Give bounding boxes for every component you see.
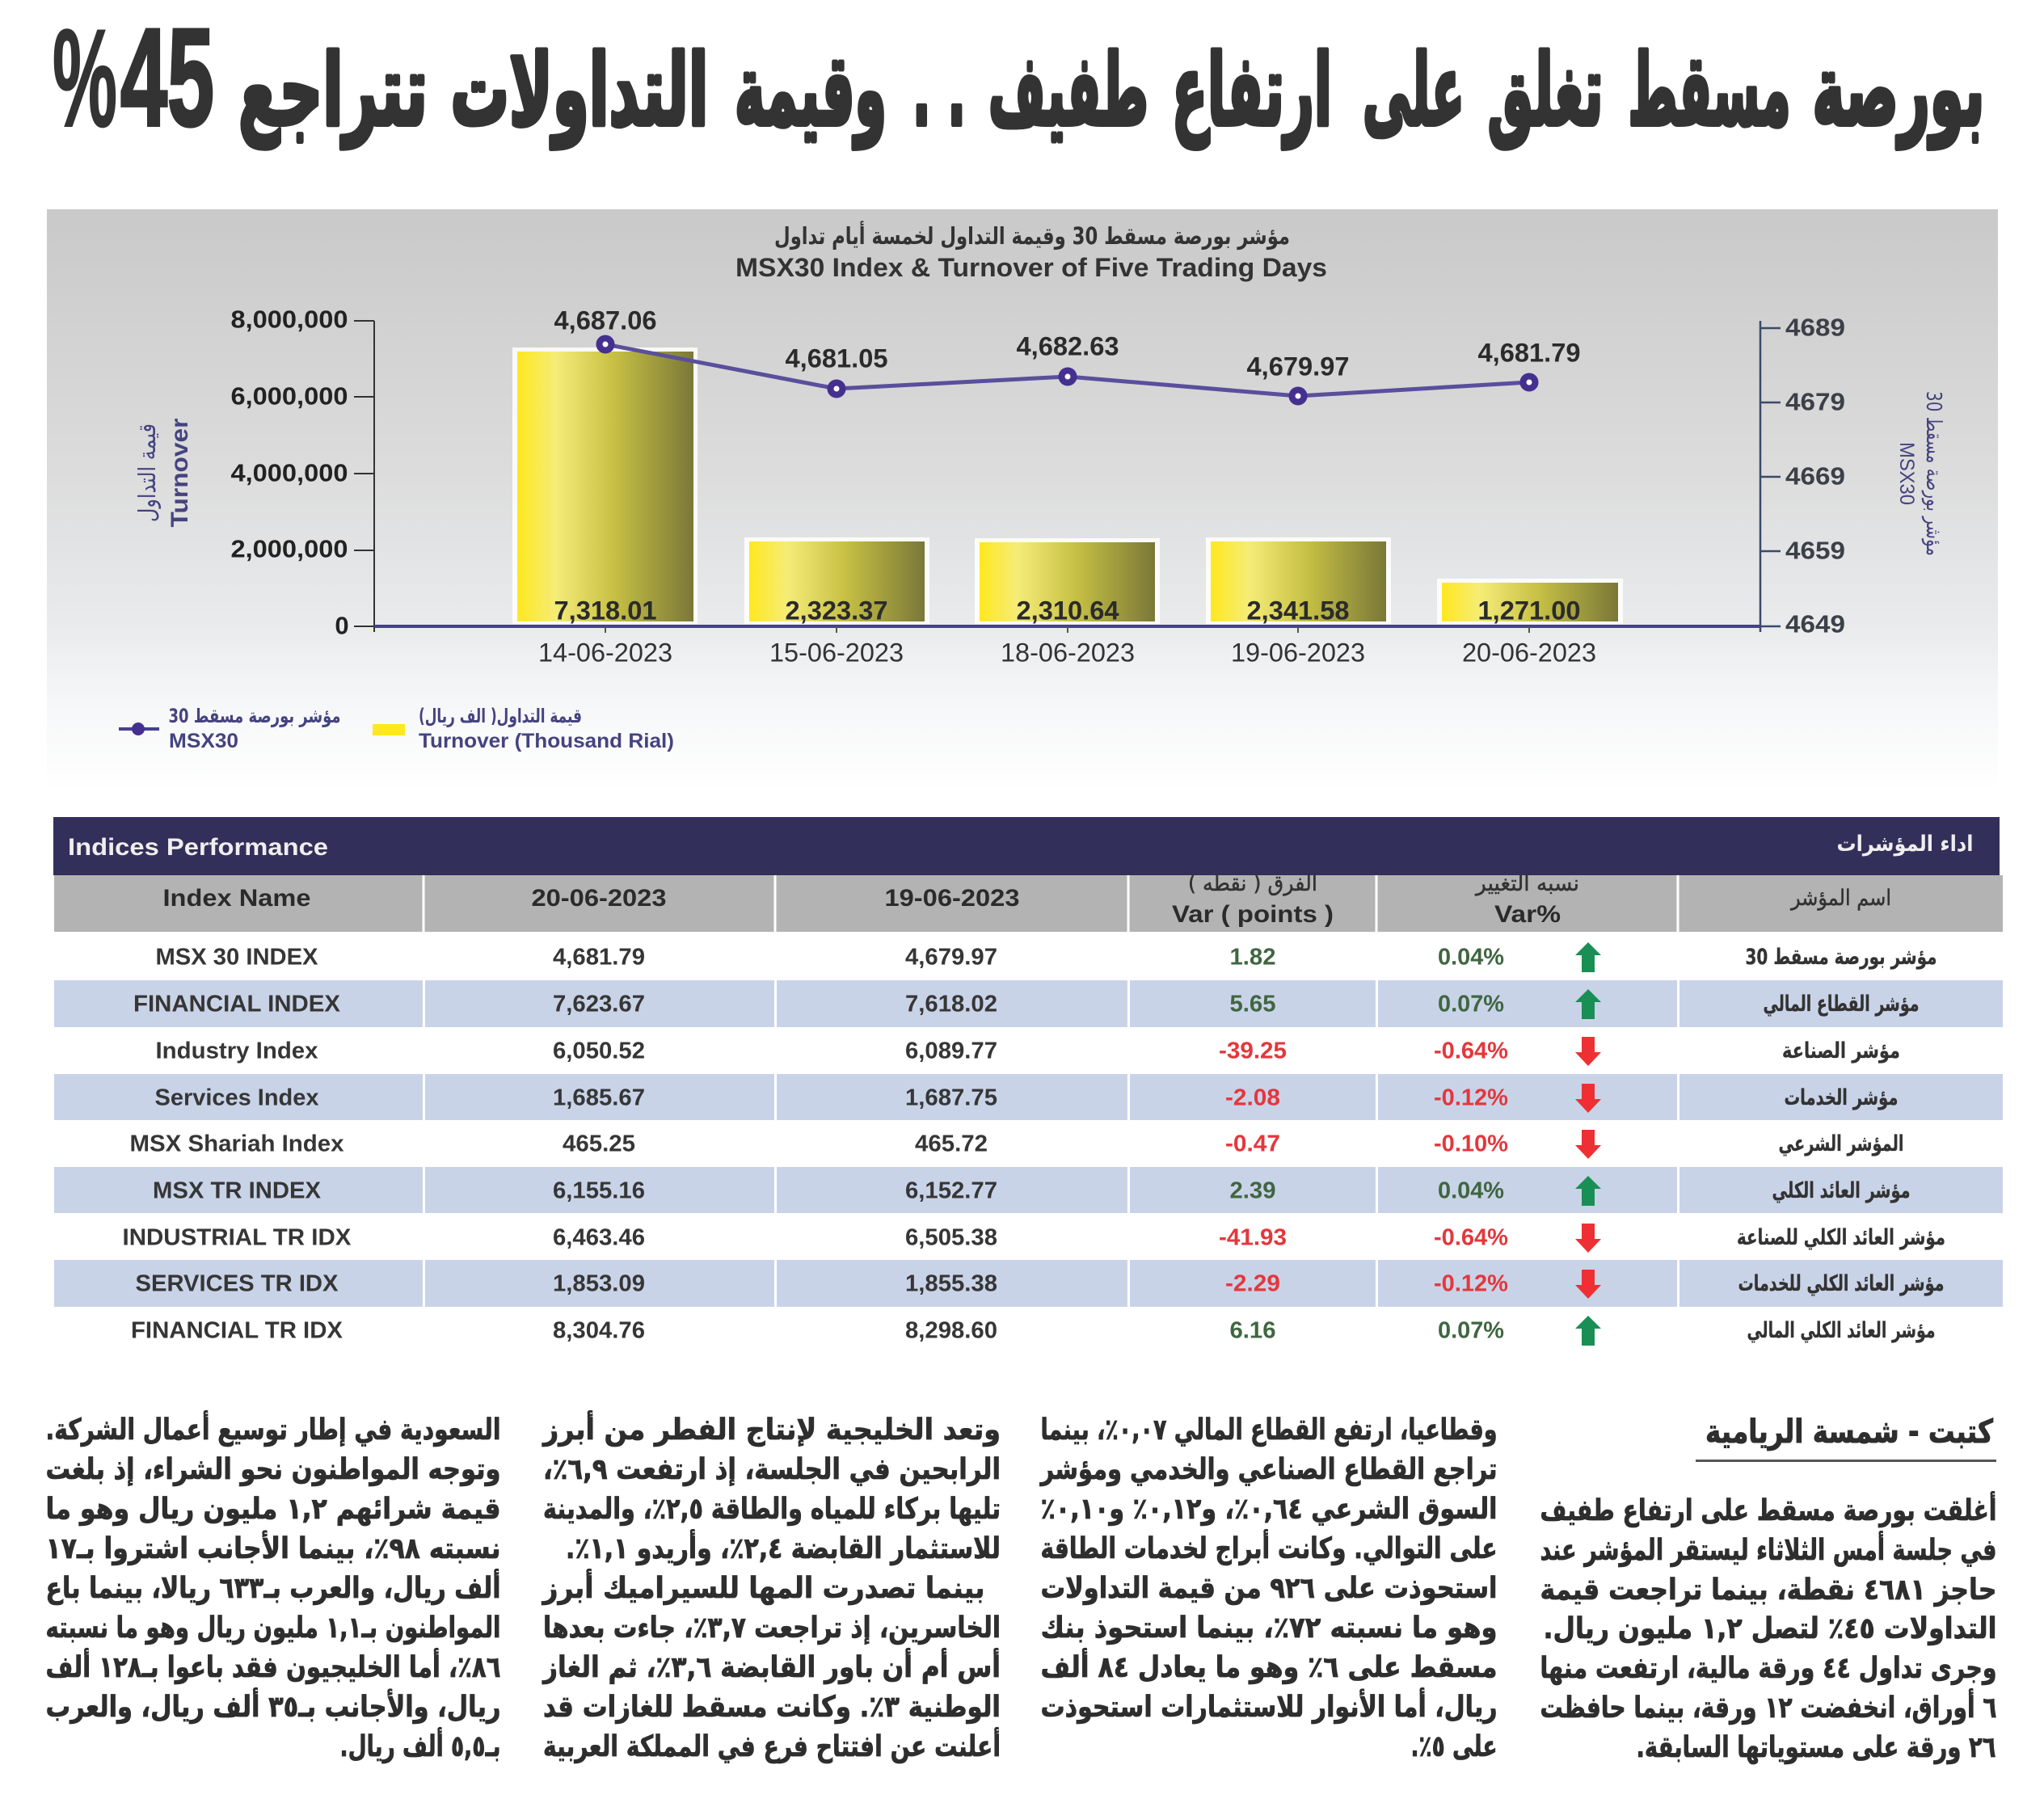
bars — [512, 348, 1623, 626]
text column 3: الخاسرين، إذ تراجعت ٣,٧٪، جاءت بعدها — [543, 1611, 1001, 1645]
legend: مؤشر بورصة مسقط 30 — [168, 705, 341, 727]
row: FINANCIAL TR IDX: FINANCIAL TR IDX — [131, 1317, 343, 1343]
row: FINANCIAL INDEX: 7,623.67 — [553, 991, 645, 1017]
right axis title: MSX30 — [1895, 442, 1918, 505]
row: Industry Index: 6,050.52 — [553, 1038, 645, 1064]
row: SERVICES TR IDX: 1,855.38 — [905, 1270, 997, 1296]
row: Services Index: -2.08 — [1225, 1085, 1280, 1110]
chart heading: MSX30 Index & Turnover of Five Trading Days — [735, 253, 1327, 282]
text column 4: ريال، والأجانب بـ٣٥ ألف ريال، والعرب — [45, 1687, 501, 1724]
table column headers: الفرق ( نقطه ) — [1188, 871, 1317, 896]
title: 45 — [120, 0, 214, 155]
bar: 14-06-2023 — [512, 348, 697, 626]
text column 3: تليها بركاء للمياه والطاقة ٢,٥٪، والمدينة — [543, 1493, 1001, 1526]
text column 4: نسبته ٩٨٪، بينما الأجانب اشتروا بـ١٧ — [45, 1530, 501, 1565]
panel: chart — [47, 209, 1998, 791]
row: Industry Index — [155, 1037, 1900, 1066]
row: Industry Index: Industry Index — [155, 1038, 318, 1064]
left axis — [231, 305, 374, 640]
row: MSX 30 INDEX: 0.04% — [1438, 944, 1504, 970]
x axis and date labels: 15-06-2023 — [769, 638, 904, 668]
line series MSX30: 4,681.79 — [1477, 338, 1581, 367]
text column 2: السوق الشرعي ٠,٦٤٪، و٠,١٢٪ و٠,١٠٪ — [1041, 1493, 1497, 1526]
bar: 19-06-2023: 2,341.58 — [1246, 596, 1350, 626]
text column 2: ريال، أما الأنوار للاستثمارات استحوذت — [1041, 1687, 1497, 1724]
text column 3: الوطنية ٣٪. وكانت مسقط للغازات قد — [543, 1691, 1001, 1724]
line series MSX30 — [554, 305, 1581, 402]
left axis: 2,000,000 — [231, 535, 348, 562]
left axis title — [133, 418, 193, 527]
table title bar: Indices Performance — [68, 834, 328, 861]
right axis: 4679 — [1785, 388, 1845, 415]
table column headers: Index Name — [163, 885, 310, 912]
text column 1: وجرى تداول ٤٤ ورقة مالية، ارتفعت منها — [1540, 1652, 1996, 1685]
row: FINANCIAL TR IDX — [131, 1316, 1935, 1346]
title: على — [1363, 33, 1465, 148]
left axis: 8,000,000 — [231, 305, 348, 333]
right axis: 4669 — [1785, 462, 1845, 490]
table column headers: Var ( points ) — [1172, 901, 1334, 928]
text column 1 — [1540, 1491, 1996, 1764]
row: Services Index: مؤشر الخدمات — [1785, 1085, 1898, 1110]
table title bar: اداء المؤشرات — [1836, 832, 1974, 857]
left axis: 0 — [335, 611, 349, 640]
bar: 20-06-2023: 1,271.00 — [1477, 596, 1581, 626]
row: SERVICES TR IDX: -0.12% — [1434, 1270, 1508, 1296]
row: Services Index: 1,685.67 — [553, 1085, 645, 1110]
table column headers: 19-06-2023 — [884, 885, 1020, 912]
row: MSX Shariah Index: MSX Shariah Index — [129, 1131, 344, 1157]
row: SERVICES TR IDX: 1,853.09 — [553, 1270, 645, 1296]
text column 4: قيمة شرائهم ١,٢ مليون ريال وهو ما — [46, 1493, 501, 1526]
chart heading — [735, 221, 1327, 282]
left axis title: Turnover — [166, 418, 193, 527]
panel: indices table — [53, 817, 2003, 1346]
row: MSX 30 INDEX: MSX 30 INDEX — [155, 944, 318, 970]
text column 3: أس أم أن باور القابضة ٣,٦٪، ثم الغاز — [542, 1648, 1001, 1684]
table column headers: Var% — [1494, 901, 1561, 928]
row: INDUSTRIAL TR IDX: 6,463.46 — [553, 1225, 645, 1251]
title: طفيف — [988, 33, 1148, 148]
left axis title: قيمة التداول — [133, 423, 161, 522]
line series MSX30: 4,681.05 — [786, 344, 887, 373]
row: MSX Shariah Index — [129, 1130, 1904, 1159]
row: MSX Shariah Index: المؤشر الشرعي — [1778, 1131, 1904, 1156]
row: INDUSTRIAL TR IDX: INDUSTRIAL TR IDX — [123, 1225, 352, 1251]
row: Services Index: -0.12% — [1434, 1085, 1508, 1110]
row: SERVICES TR IDX: مؤشر العائد الكلي للخدمات — [1738, 1271, 1945, 1296]
right axis: 4649 — [1785, 609, 1845, 638]
legend: قيمة التداول( الف ريال) — [419, 705, 582, 727]
bar: 14-06-2023: 7,318.01 — [554, 596, 656, 626]
table title bar — [53, 817, 2000, 875]
text column 2: على التوالي. وكانت أبراج لخدمات الطاقة — [1041, 1529, 1497, 1565]
title: تغلق — [1487, 33, 1604, 149]
row: MSX 30 INDEX: 4,679.97 — [905, 944, 997, 970]
row: MSX 30 INDEX: 4,681.79 — [553, 944, 645, 970]
line series MSX30: 4,687.06 — [554, 305, 656, 335]
text column 3: الرابحين في الجلسة، إذ ارتفعت ٦,٩٪، — [543, 1453, 1001, 1486]
row: MSX 30 INDEX: مؤشر بورصة مسقط 30 — [1746, 945, 1937, 970]
row: FINANCIAL TR IDX: 8,298.60 — [905, 1317, 997, 1343]
row: INDUSTRIAL TR IDX: -41.93 — [1219, 1225, 1287, 1251]
row: INDUSTRIAL TR IDX: مؤشر العائد الكلي للصناعة — [1737, 1225, 1945, 1250]
right axis: 4689 — [1785, 314, 1845, 341]
title: . . — [912, 33, 966, 148]
row: FINANCIAL INDEX: مؤشر القطاع المالي — [1764, 992, 1919, 1017]
text column 3: وتعد الخليجية لإنتاج الفطر من أبرز — [542, 1410, 1001, 1447]
text column 1: حاجز ٤٦٨١ نقطة، بينما تراجعت قيمة — [1540, 1573, 1996, 1607]
text column 2: استحوذت على ٩٢٦ من قيمة التداولات — [1041, 1572, 1497, 1605]
title: تتراجع — [238, 33, 428, 149]
text column 4: بـ٥,٥ ألف ريال. — [339, 1727, 501, 1763]
byline heading — [1696, 1413, 1996, 1462]
text column 3 — [542, 1410, 1001, 1763]
row: FINANCIAL INDEX: 5.65 — [1230, 991, 1275, 1017]
row: FINANCIAL INDEX: FINANCIAL INDEX — [133, 991, 341, 1017]
bar: 19-06-2023 — [1206, 537, 1391, 626]
right axis: 4659 — [1785, 537, 1845, 564]
row: MSX Shariah Index: 465.72 — [915, 1131, 988, 1157]
bar: 15-06-2023 — [744, 537, 929, 626]
title — [53, 0, 1985, 156]
bar: 20-06-2023 — [1437, 579, 1623, 626]
x axis and date labels: 19-06-2023 — [1231, 638, 1365, 668]
row: MSX TR INDEX: 6,152.77 — [905, 1178, 997, 1204]
row: MSX TR INDEX: 2.39 — [1230, 1178, 1275, 1204]
chart heading: مؤشر بورصة مسقط 30 وقيمة التداول لخمسة أيام تداول — [774, 221, 1290, 250]
row: FINANCIAL TR IDX: 6.16 — [1230, 1317, 1275, 1343]
row: SERVICES TR IDX: SERVICES TR IDX — [136, 1270, 339, 1296]
row: INDUSTRIAL TR IDX: 6,505.38 — [905, 1225, 997, 1251]
row: Services Index — [54, 1074, 2003, 1120]
text column 3: بينما تصدرت المها للسيراميك أبرز — [542, 1569, 984, 1605]
row: MSX Shariah Index: -0.10% — [1434, 1131, 1508, 1157]
row: FINANCIAL INDEX: 7,618.02 — [905, 991, 997, 1017]
text column 3: للاستثمار القابضة ٢,٤٪، وأريدو ١,١٪. — [566, 1529, 1001, 1565]
right axis — [1760, 314, 1845, 638]
row: Industry Index: -39.25 — [1219, 1038, 1287, 1064]
left axis: 6,000,000 — [231, 381, 348, 411]
right axis title — [1895, 391, 1945, 556]
text column 2: مسقط على ٦٪ وهو ما يعادل ٨٤ ألف — [1041, 1648, 1497, 1684]
title: % — [53, 1, 117, 156]
row: Industry Index: مؤشر الصناعة — [1782, 1038, 1900, 1064]
table column headers — [54, 871, 2003, 932]
row: MSX TR INDEX — [54, 1167, 2003, 1213]
title: وقيمة — [735, 33, 887, 149]
row: MSX Shariah Index: 465.25 — [563, 1131, 635, 1157]
bar: 18-06-2023: 2,310.64 — [1017, 596, 1119, 626]
row: Industry Index: 6,089.77 — [905, 1038, 997, 1064]
right axis title: مؤشر بورصة مسقط 30 — [1921, 391, 1945, 556]
row: SERVICES TR IDX — [54, 1260, 2003, 1307]
row: SERVICES TR IDX: -2.29 — [1225, 1270, 1280, 1296]
text column 2: وهو ما نسبته ٧٢٪، بينما استحوذ بنك — [1041, 1611, 1497, 1645]
row: FINANCIAL TR IDX: مؤشر العائد الكلي المالي — [1747, 1318, 1935, 1343]
text column 2 — [1039, 1413, 1497, 1763]
bar: 15-06-2023: 2,323.37 — [786, 596, 887, 626]
text column 1: ٦ أوراق، انخفضت ١٢ ورقة، بينما حافظت — [1540, 1688, 1996, 1725]
row: MSX 30 INDEX — [155, 942, 1937, 972]
title: مسقط — [1628, 33, 1791, 148]
row: Services Index: Services Index — [155, 1085, 318, 1110]
legend: Turnover (Thousand Rial) — [419, 730, 674, 752]
text column 4: المواطنون بـ١,١ مليون ريال وهو ما نسبته — [45, 1611, 501, 1645]
text column 3: أعلنت عن افتتاح فرع في المملكة العربية — [543, 1727, 1001, 1763]
left axis: 4,000,000 — [231, 459, 348, 487]
text column 2: تراجع القطاع الصناعي والخدمي ومؤشر — [1039, 1453, 1497, 1486]
x axis and date labels: 18-06-2023 — [1001, 638, 1135, 668]
row: FINANCIAL TR IDX: 8,304.76 — [553, 1317, 645, 1343]
text column 2: وقطاعيا، ارتفع القطاع المالي ٠,٠٧٪، بينما — [1041, 1413, 1497, 1447]
text column 4: ٨٦٪، أما الخليجيون فقد باعوا بـ١٢٨ ألف — [45, 1648, 501, 1684]
row: MSX TR INDEX: 0.04% — [1438, 1178, 1504, 1204]
row: Services Index: 1,687.75 — [905, 1085, 997, 1110]
text column 1: التداولات ٤٥٪ لتصل ١,٢ مليون ريال. — [1544, 1612, 1996, 1645]
x axis and date labels — [374, 626, 1760, 668]
title: التداولات — [451, 33, 708, 149]
row: FINANCIAL TR IDX: 0.07% — [1438, 1317, 1504, 1343]
row: MSX TR INDEX: مؤشر العائد الكلي — [1772, 1178, 1911, 1203]
text column 2: على ٥٪. — [1411, 1730, 1497, 1763]
row: MSX TR INDEX: MSX TR INDEX — [153, 1178, 322, 1204]
bar: 18-06-2023 — [975, 538, 1160, 626]
row: INDUSTRIAL TR IDX — [123, 1224, 1945, 1253]
table column headers: 20-06-2023 — [532, 885, 666, 912]
line series MSX30: 4,679.97 — [1246, 352, 1350, 381]
text column 4 — [45, 1410, 501, 1763]
row: FINANCIAL INDEX — [54, 980, 2003, 1027]
x axis and date labels: 20-06-2023 — [1462, 638, 1596, 668]
row: INDUSTRIAL TR IDX: -0.64% — [1434, 1225, 1508, 1251]
row: Industry Index: -0.64% — [1434, 1038, 1508, 1064]
title: ارتفاع — [1172, 33, 1332, 149]
table column headers: اسم المؤشر — [1789, 886, 1891, 911]
row: MSX 30 INDEX: 1.82 — [1230, 944, 1275, 970]
row: MSX TR INDEX: 6,155.16 — [553, 1178, 645, 1204]
table column headers: نسبه التغيير — [1474, 871, 1579, 896]
text column 4: وتوجه المواطنون نحو الشراء، إذ بلغت — [45, 1453, 501, 1486]
row: FINANCIAL INDEX: 0.07% — [1438, 991, 1504, 1017]
x axis and date labels: 14-06-2023 — [538, 638, 672, 668]
line series MSX30: 4,682.63 — [1017, 331, 1119, 360]
legend: MSX30 — [169, 730, 238, 752]
text column 4: ألف ريال، والعرب بـ٦٣٣ ريالا، بينما باع — [45, 1569, 501, 1605]
row: MSX Shariah Index: -0.47 — [1225, 1131, 1280, 1157]
text column 4: السعودية في إطار توسيع أعمال الشركة. — [45, 1410, 501, 1447]
legend — [119, 705, 674, 752]
